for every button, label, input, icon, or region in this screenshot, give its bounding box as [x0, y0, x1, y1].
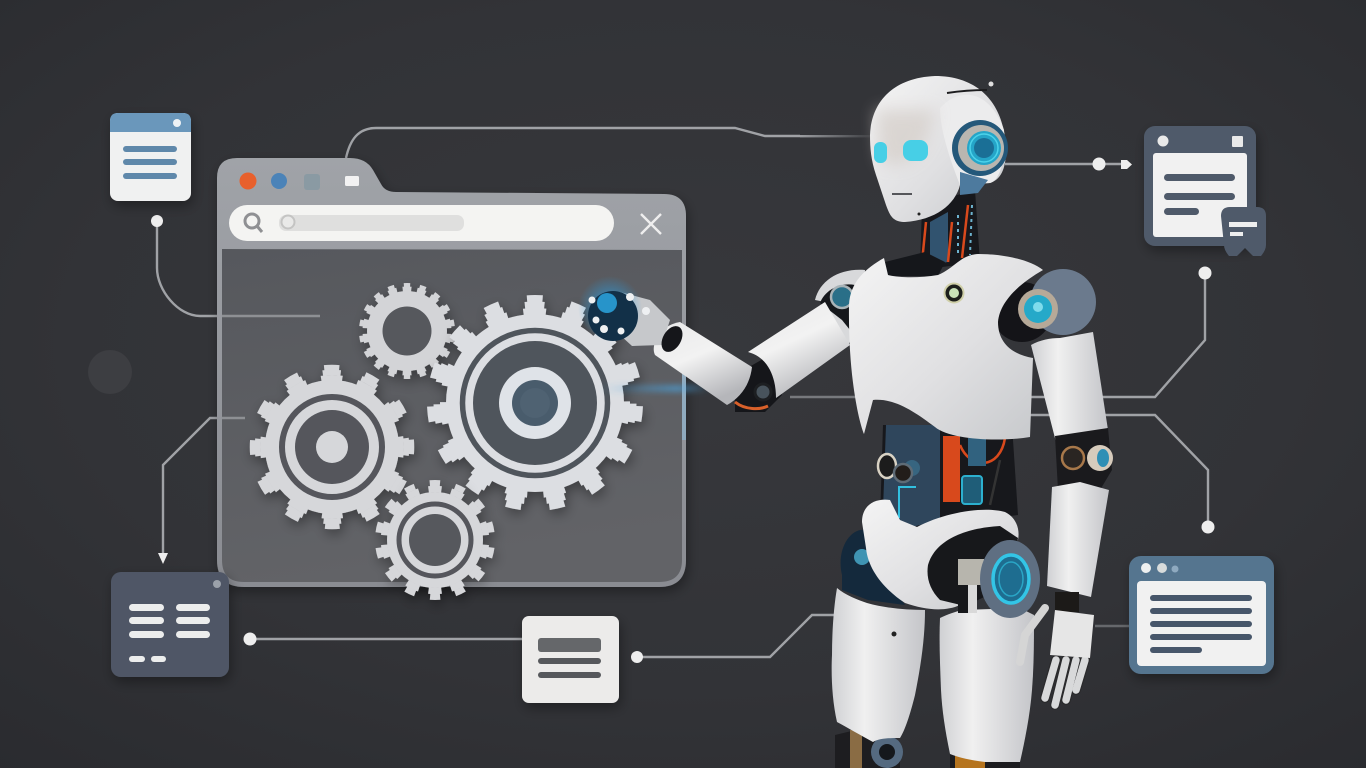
elbow joint outer: [1062, 445, 1113, 471]
eye: left: [874, 142, 887, 163]
left knee joint: [871, 736, 903, 768]
connector nodes: [151, 158, 1214, 663]
hip highlight: [854, 549, 870, 565]
icon: magnifier: [245, 214, 262, 232]
ear joint: [952, 120, 1008, 176]
right forearm: [1047, 482, 1109, 597]
left thigh shell: [832, 588, 925, 742]
forehead highlight: [876, 110, 936, 165]
mouth: [892, 193, 912, 195]
window content pane: [222, 249, 682, 582]
connector: window tab to robot head: [346, 128, 800, 158]
card page: [1137, 581, 1266, 666]
robot: left shoulder cap: [815, 270, 865, 345]
chin dot: [918, 212, 920, 216]
gear: large right: [430, 298, 640, 508]
connector fade toward head: [800, 135, 870, 137]
hip strut: [958, 585, 968, 613]
connector lines: [157, 128, 1208, 657]
panel: browser window: [217, 158, 686, 587]
robot: right shoulder: [992, 269, 1096, 342]
robot: torso mechanism opening: [885, 252, 945, 276]
antenna nub: [988, 82, 994, 86]
connector: top-right dot to robot body: [1030, 273, 1205, 397]
card: lower-right: [1129, 556, 1274, 674]
card dot: [173, 119, 181, 127]
robot: right leg: [940, 608, 1034, 768]
node: arrow into bottom-left card: [158, 553, 168, 564]
hip cylinder: [958, 559, 984, 585]
gear: left medium: [252, 368, 412, 526]
button: faded: [304, 174, 320, 190]
connector: bottom-left card to bottom-centre card: [250, 638, 522, 640]
blue fins: [968, 438, 986, 466]
abdomen dark base: [880, 425, 1018, 530]
robot: left hip: [841, 530, 905, 605]
neck light pattern: [958, 205, 972, 255]
card dot: [1158, 136, 1168, 146]
lower left leg joint: [835, 727, 900, 768]
fingers: [588, 293, 650, 334]
glow: [578, 276, 642, 340]
robot: [578, 76, 1113, 768]
left thigh pin: [892, 632, 896, 636]
card dots: [1141, 563, 1178, 573]
neck orange wires: [922, 205, 968, 262]
badge lines: [1229, 222, 1257, 236]
card: bottom-centre: [522, 616, 619, 703]
button: orange: [240, 172, 256, 190]
lower right accent: [955, 755, 985, 768]
head seam: [947, 90, 987, 93]
connector: forearm to lower-right card: [1095, 625, 1130, 627]
card body: [1129, 556, 1274, 674]
connector: window to bottom-left card: [163, 418, 222, 556]
robot: reaching upper arm: [735, 302, 850, 412]
neck blue: [930, 212, 948, 265]
node: right of bottom-centre card: [631, 651, 643, 663]
fingers: [1045, 660, 1085, 705]
robot: torso shell: [849, 254, 1043, 440]
robot: right upper arm: [1031, 332, 1108, 442]
faint background circle: [88, 350, 132, 394]
chest badge core: [949, 288, 959, 298]
blue collar below ear: [960, 172, 988, 195]
light flare: [600, 385, 710, 392]
orange trim: [735, 402, 768, 409]
upper arm shell: [748, 302, 850, 398]
blue hip housing: [841, 530, 905, 605]
node: ear connector: [1092, 158, 1106, 170]
robot: head: [870, 76, 1008, 222]
connector segments over pane: [222, 316, 320, 418]
gear: top small: [361, 285, 453, 377]
robot: hand: [578, 276, 687, 356]
right thigh shell: [940, 608, 1034, 762]
connector: robot body to lower-right dot: [1030, 415, 1208, 527]
card body: [522, 616, 619, 703]
tab icon: [345, 176, 359, 186]
pelvis cavity: [928, 526, 1018, 606]
card: bottom-left: [111, 572, 229, 677]
palm light: [597, 293, 617, 313]
wires: [960, 438, 1005, 463]
elbow housing: [1055, 428, 1112, 490]
card page: [1153, 153, 1247, 237]
node: left of bottom-centre card: [244, 632, 256, 646]
wrist socket: [657, 322, 687, 356]
connector: bottom-centre card to robot leg: [637, 615, 835, 657]
node: below top-right card: [1198, 266, 1212, 280]
chest badge: [944, 284, 964, 302]
window frame: [217, 158, 686, 587]
robot: neck: [920, 190, 980, 270]
card lines: [1150, 595, 1252, 653]
button: blue: [271, 173, 287, 189]
elbow joint: [755, 384, 771, 400]
connector: elbow to robot body: [790, 396, 860, 398]
window edge glow: [682, 350, 686, 440]
orange block: [943, 436, 960, 502]
wrist: [1055, 592, 1079, 612]
connector: top-left card to window: [157, 221, 222, 316]
node: below top-left card: [151, 215, 163, 227]
abdomen blue core: [883, 425, 940, 530]
shoulder cavity: [992, 282, 1052, 342]
node: ear connector tip: [1121, 160, 1132, 169]
robot: left leg: [832, 588, 925, 768]
hip strut light: [968, 585, 977, 613]
gears: [252, 285, 710, 597]
hand block: [1050, 610, 1094, 658]
card: top-right: [1144, 126, 1266, 256]
head shell: [870, 76, 1006, 222]
node: above lower-right card: [1202, 520, 1214, 534]
card lines: [129, 604, 210, 662]
card: top-left: [110, 113, 191, 201]
head side panel: [940, 95, 1004, 185]
card dot: [213, 580, 221, 588]
thumb: [1020, 608, 1045, 662]
card body: [111, 572, 229, 677]
search bar: [229, 205, 614, 241]
elbow cavity: [735, 355, 782, 412]
card lines: [123, 146, 177, 179]
dark palm: [588, 291, 638, 341]
card body: [1144, 126, 1256, 246]
card square: [1232, 136, 1243, 147]
abdomen eye joints: [878, 454, 920, 482]
robot: abdomen mechanics: [878, 425, 1018, 530]
search text placeholder: [279, 215, 464, 231]
speech bubble badge: [1221, 207, 1266, 256]
left shin strut: [850, 730, 862, 768]
card lines: [538, 638, 601, 678]
eye: right: [903, 140, 928, 161]
robot: shoulder joint: [1018, 289, 1058, 329]
robot: reaching forearm: [654, 322, 752, 405]
shoulder ball: [1030, 269, 1096, 335]
card header: [110, 113, 191, 132]
lower right joint: [950, 752, 1020, 768]
palm and wrist: [620, 292, 670, 346]
search placeholder circle: [282, 216, 294, 228]
robot: elbow and forearm right: [1020, 428, 1113, 705]
card lines: [1164, 174, 1235, 215]
robot: pelvis shell: [862, 500, 1040, 618]
gear: bottom small: [378, 483, 492, 597]
blue box: [962, 476, 982, 504]
icon: close: [641, 214, 661, 234]
cyan pipe: [899, 487, 916, 518]
connector: robot ear to top-right card: [1005, 163, 1127, 165]
dark cable: [990, 460, 1000, 505]
hip disc: [980, 540, 1040, 618]
